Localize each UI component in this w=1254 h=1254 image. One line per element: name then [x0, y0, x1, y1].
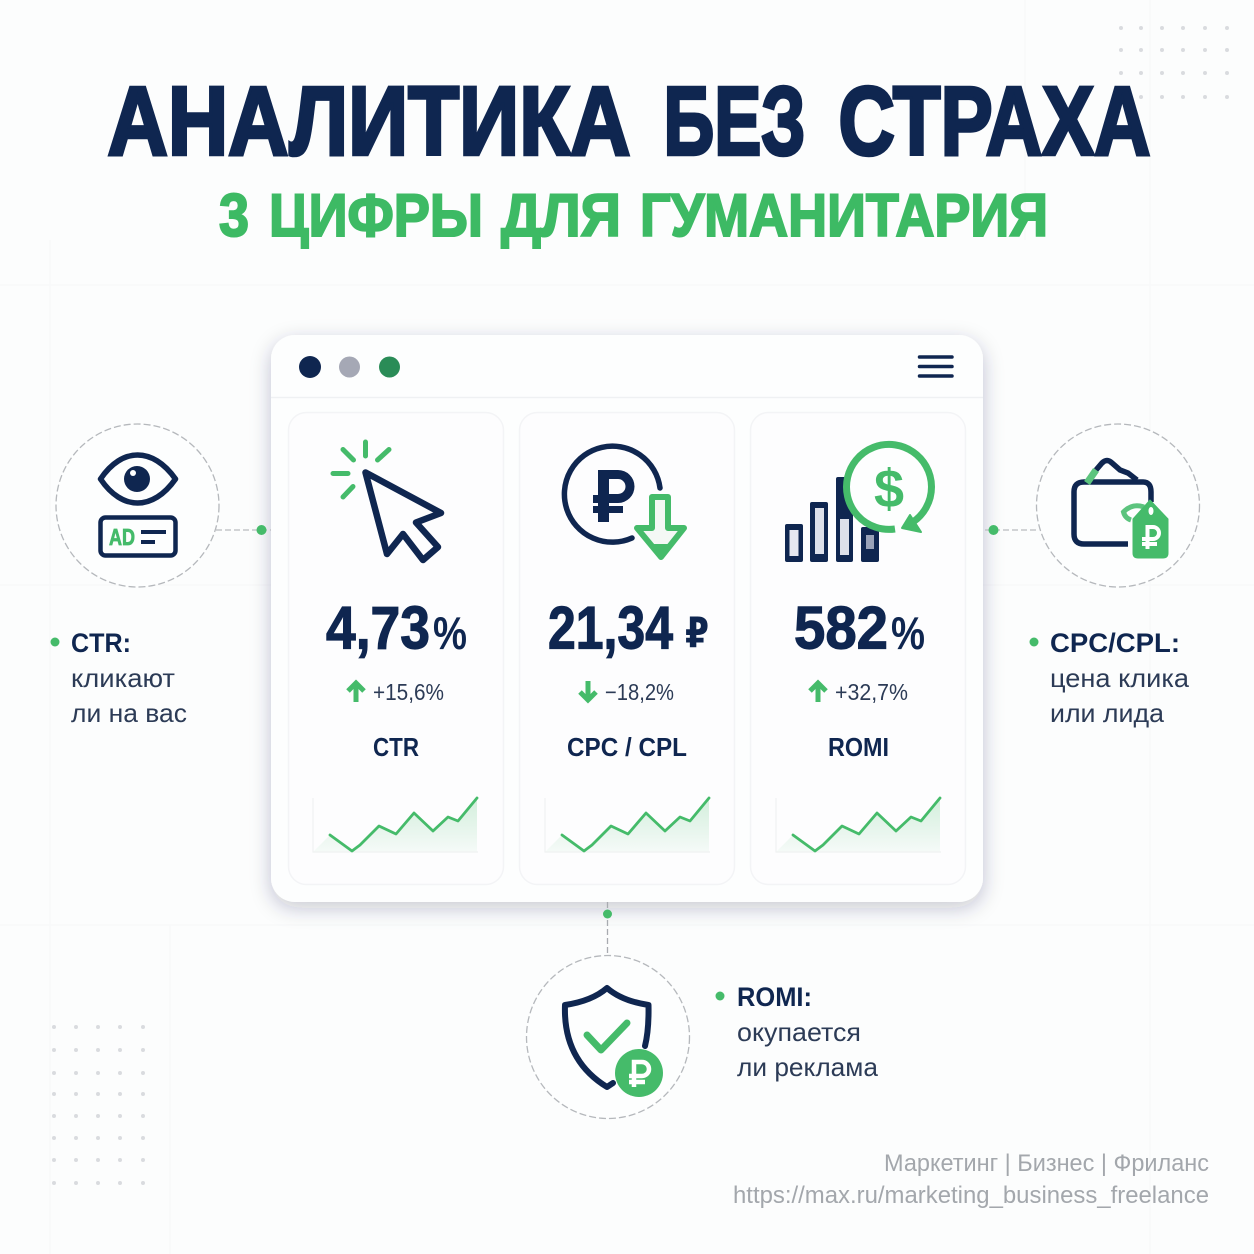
text block: CTR: ли на вас — [71, 698, 187, 728]
trend: up: +15,6% — [373, 679, 444, 705]
sparkline — [776, 798, 941, 852]
text block: CPC/CPL: или лида — [1050, 698, 1165, 728]
text block: CTR — [50, 628, 187, 728]
panel: dashboard window — [271, 335, 983, 902]
metric unit: % — [891, 607, 925, 659]
metric name: ROMI — [828, 732, 889, 762]
icon: eye and ad — [56, 424, 219, 587]
icon: eye and ad: AD — [109, 524, 135, 550]
trend: up — [348, 679, 444, 705]
window control dots — [299, 356, 400, 378]
metric value: CTR: 4,73 — [326, 594, 430, 662]
metric value: ROMI: 582 — [794, 594, 888, 662]
icon: wallet and price tag — [1036, 424, 1200, 587]
connector: right — [985, 525, 1038, 535]
trend: down — [580, 679, 674, 705]
icon: bars and dollar cycle — [785, 444, 931, 562]
text block: ROMI — [716, 982, 879, 1082]
icon: ruble price down — [564, 446, 684, 560]
panel: CPC / CPL card — [520, 412, 734, 884]
subtitle — [219, 182, 1048, 249]
panel: ROMI card — [750, 412, 966, 884]
text block: ROMI: окупается — [737, 1017, 861, 1047]
icon: bars and dollar cycle: $ — [874, 459, 904, 519]
footer — [733, 1150, 1209, 1209]
title: АНАЛИТИКА — [108, 66, 630, 175]
icon: shield and ruble — [526, 956, 690, 1118]
title: СТРАХА — [838, 66, 1150, 175]
subtitle: ГУМАНИТАРИЯ — [640, 182, 1048, 249]
footer: Маркетинг | Бизнес | Фриланс — [884, 1150, 1209, 1177]
footer: https://max.ru/marketing_business_freelance — [733, 1182, 1209, 1209]
text block: CPC/CPL: цена клика — [1050, 663, 1190, 693]
connector: bottom — [603, 902, 612, 956]
metric unit: % — [433, 607, 467, 659]
text block: CPC/CPL — [1030, 628, 1190, 728]
title: БЕЗ — [664, 66, 806, 175]
sparkline — [313, 798, 478, 852]
text block: ROMI: ROMI: — [737, 982, 812, 1012]
connector: left — [216, 525, 271, 535]
trend: up: +32,7% — [835, 679, 908, 705]
text block: CTR: CTR: — [71, 628, 131, 658]
title — [108, 66, 1150, 175]
text block: ROMI: ли реклама — [737, 1052, 879, 1082]
icon: hamburger menu — [920, 357, 952, 376]
icon: cursor click — [333, 442, 441, 560]
metric unit: ₽ — [685, 609, 709, 656]
trend: down: −18,2% — [605, 679, 674, 705]
panel: CTR card — [288, 412, 504, 884]
metric name: CPC / CPL — [567, 732, 687, 762]
metric value: CPC: 21,34 — [548, 594, 674, 662]
text block: CTR: кликают — [71, 663, 175, 693]
metric name: CTR — [373, 732, 419, 762]
subtitle: 3 — [219, 182, 249, 249]
subtitle: ДЛЯ — [501, 182, 621, 249]
sparkline — [545, 798, 710, 852]
subtitle: ЦИФРЫ — [269, 182, 483, 249]
text block: CPC/CPL: CPC/CPL: — [1050, 628, 1180, 658]
